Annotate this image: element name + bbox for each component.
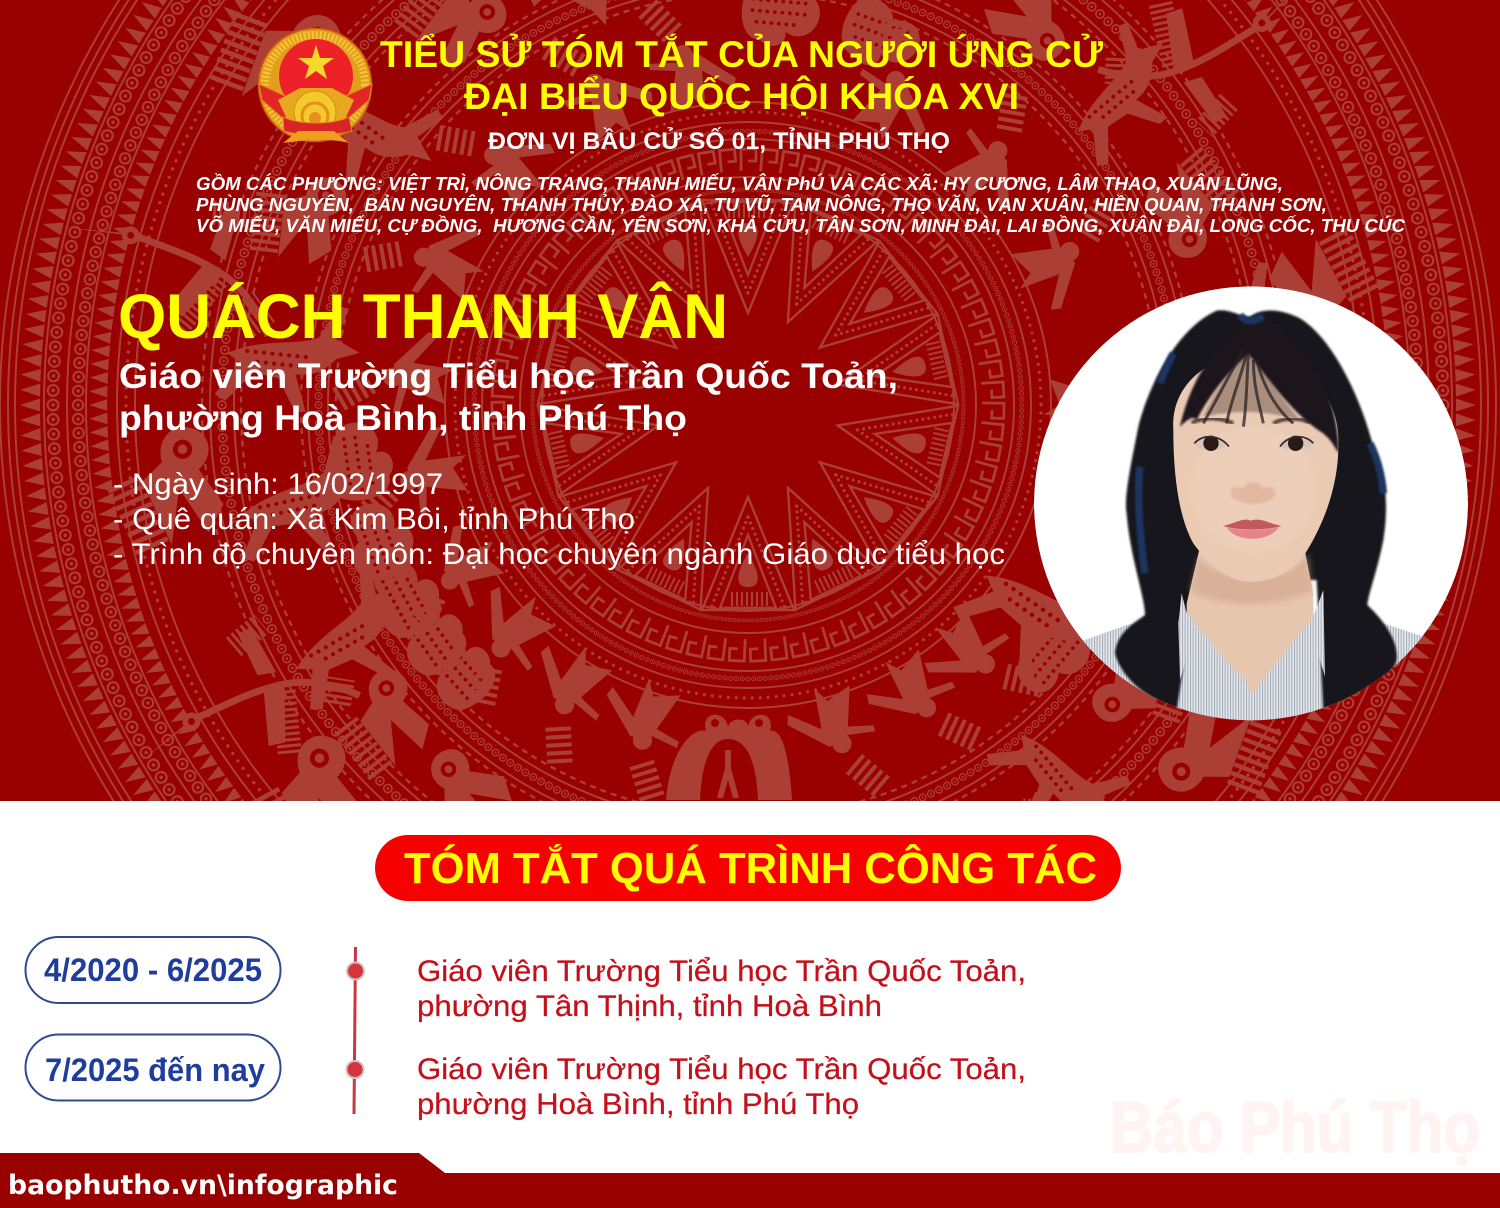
blue highlights <box>1139 315 1383 573</box>
shirt <box>1083 613 1422 720</box>
date pill 1 <box>26 937 280 1003</box>
text block: personal facts: - Quê quán: Xã Kim Bôi, tỉnh Phú Thọ <box>113 503 635 536</box>
emblem: national emblem <box>258 28 372 143</box>
text block: wards list <box>196 173 1406 236</box>
footer bar: baophutho.vn\infographic <box>8 1170 398 1201</box>
text block: job 2: phường Hoà Bình, tỉnh Phú Thọ <box>417 1088 859 1121</box>
cheek shade <box>1190 427 1317 553</box>
back hair <box>1115 310 1397 710</box>
photo: candidate portrait <box>1034 286 1468 727</box>
footer bar <box>0 1153 1500 1208</box>
text block: job 1 <box>417 955 1026 1023</box>
date pill 1: 4/2020 - 6/2025 <box>44 952 262 988</box>
text block: job 1: phường Tân Thịnh, tỉnh Hoà Bình <box>417 990 882 1023</box>
panel: white work history <box>0 801 1500 1208</box>
text block: job 2: Giáo viên Trường Tiểu học Trần Quốc Toản, <box>417 1053 1026 1086</box>
text block: personal facts: - Ngày sinh: 16/02/1997 <box>113 468 443 501</box>
forehead veil <box>1203 353 1300 420</box>
bronze drum pattern <box>0 0 1497 801</box>
neck <box>1187 543 1313 693</box>
heading pill: work history <box>375 835 1121 901</box>
nose <box>1231 482 1276 504</box>
brows <box>1192 419 1310 423</box>
text block: wards list: GỒM CÁC PHƯỜNG: VIỆT TRÌ, NÔNG TRANG, THANH MIẾU, VÂN PhÚ VÀ CÁC XÃ: HY CƯƠNG, LÂM THAO, XUÂN LŨNG, <box>196 173 1283 194</box>
text block: position: Giáo viên Trường Tiểu học Trần Quốc Toản, <box>119 357 898 396</box>
panel: red drum background <box>0 0 1500 801</box>
title: ĐẠI BIỂU QUỐC HỘI KHÓA XVI <box>464 75 1019 117</box>
heading pill: work history: TÓM TẮT QUÁ TRÌNH CÔNG TÁC <box>404 842 1097 893</box>
date pill 2: 7/2025 đến nay <box>45 1052 265 1088</box>
text block: personal facts: - Trình độ chuyên môn: Đại học chuyên ngành Giáo dục tiểu học <box>113 538 1005 571</box>
text block: wards list: PHÙNG NGUYÊN, BẢN NGUYÊN, THANH THỦY, ĐÀO XÁ, TU VŨ, TAM NÔNG, THỌ VĂN, VẠN XUÂN, HIỀN QUAN, THANH SƠN, <box>196 194 1327 215</box>
lips <box>1223 520 1282 529</box>
text block: personal facts <box>113 468 1005 571</box>
face <box>1173 353 1338 582</box>
neck shadow <box>1190 553 1313 604</box>
date pill 2 <box>26 1034 280 1100</box>
title <box>380 33 1103 117</box>
timeline node 1 <box>347 962 364 980</box>
timeline <box>346 947 364 1114</box>
eyes <box>1194 436 1313 451</box>
text block: position: phường Hoà Bình, tỉnh Phú Thọ <box>119 399 687 438</box>
bangs <box>1178 353 1338 454</box>
subtitle: constituency: ĐƠN VỊ BẦU CỬ SỐ 01, TỈNH PHÚ THỌ <box>488 126 950 155</box>
text block: job 1: Giáo viên Trường Tiểu học Trần Quốc Toản, <box>417 955 1026 988</box>
title: TIỂU SỬ TÓM TẮT CỦA NGƯỜI ỨNG CỬ <box>380 33 1103 75</box>
text block: position <box>119 357 898 438</box>
bang strands <box>1203 350 1293 427</box>
collar <box>1178 590 1325 692</box>
timeline node 2 <box>346 1061 364 1078</box>
text block: job 2 <box>417 1053 1026 1121</box>
heading: candidate name: QUÁCH THANH VÂN <box>118 281 728 352</box>
text block: wards list: VÕ MIẾU, VĂN MIẾU, CỰ ĐỒNG, HƯƠNG CẦN, YÊN SƠN, KHẢ CỬU, TÂN SƠN, MINH ĐÀI, LAI ĐỒNG, XUÂN ĐÀI, LONG CỐC, THU CÚC <box>196 215 1406 236</box>
